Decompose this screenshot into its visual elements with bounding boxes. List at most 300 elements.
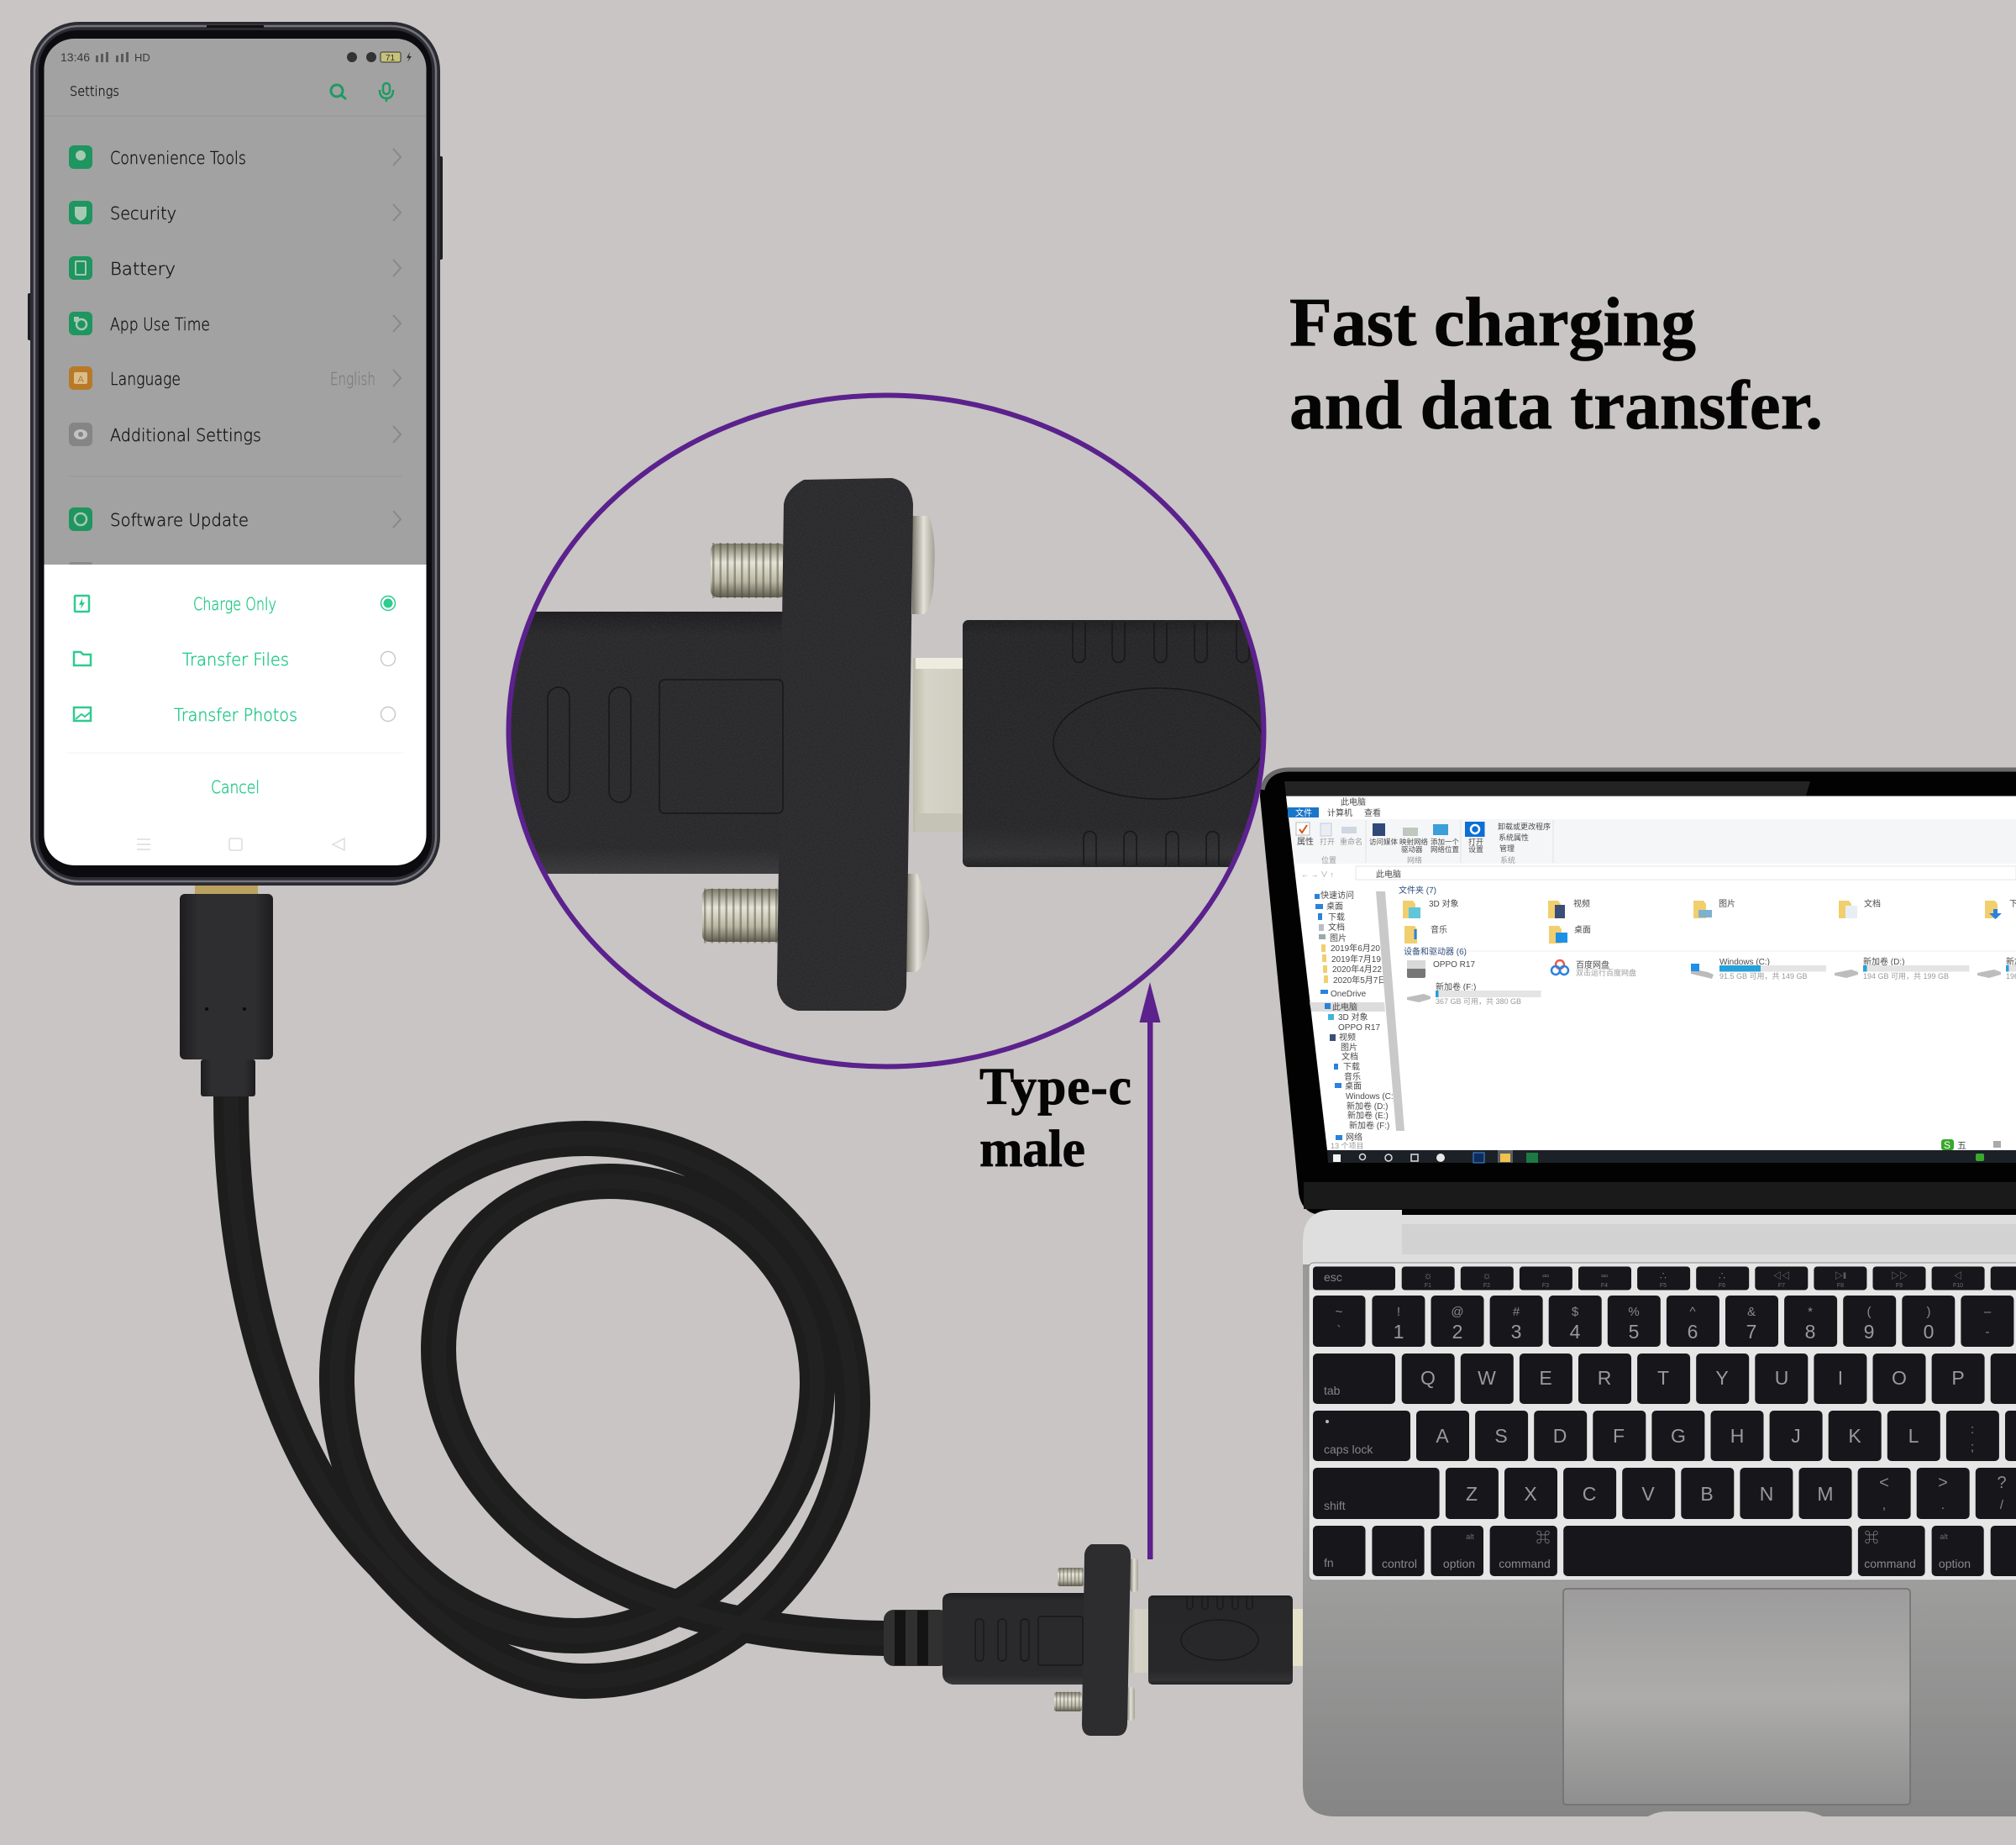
large upper screw (711, 544, 786, 597)
large lower screw (702, 889, 782, 942)
navigation pane: 此电脑 (1332, 1001, 1357, 1012)
number key row: 6 (1688, 1321, 1698, 1343)
row: battery: Battery (110, 259, 176, 279)
function key row: F6 (1719, 1283, 1725, 1289)
function key row: ▫▫ (1542, 1271, 1549, 1281)
address bar: ← → ∨ ↑ (1301, 870, 1334, 879)
qwerty key row (1313, 1354, 2016, 1404)
label: type-c male: Type-c (979, 1059, 1131, 1116)
media icon (1373, 823, 1385, 836)
status bar: HD (134, 51, 150, 64)
status bar: 13:46 (60, 50, 90, 64)
asdf key row: caps lock (1324, 1443, 1373, 1456)
flange (1082, 1544, 1131, 1736)
phone device: OPPO R17 (1433, 960, 1475, 970)
drive D (1835, 956, 1969, 980)
zxcv key row: X (1524, 1483, 1537, 1505)
number key row: ( (1866, 1305, 1872, 1319)
function key row: esc (1324, 1270, 1342, 1284)
navigation pane (1310, 890, 1396, 1150)
folder labels: 文档 (1864, 898, 1881, 909)
modifier key row: command (1864, 1557, 1916, 1570)
number key row: @ (1451, 1305, 1464, 1319)
ribbon buttons: 卸载或更改程序 (1498, 822, 1551, 831)
status icons (347, 52, 412, 63)
qwerty key row: tab (1324, 1384, 1341, 1397)
number key row: 8 (1805, 1321, 1815, 1343)
usb options sheet (44, 565, 427, 867)
zxcv key row: Z (1466, 1483, 1478, 1505)
metal plug into laptop (1291, 1609, 1303, 1666)
laptop (1260, 768, 2016, 1817)
folder labels (1429, 898, 2016, 935)
plug dots (205, 1007, 246, 1011)
number key row (1313, 1296, 2013, 1347)
ribbon (1289, 819, 2016, 864)
modifier key row: ⌘ (1865, 1530, 1878, 1546)
modifier key row: option (1443, 1557, 1475, 1570)
qwerty key row: Q (1420, 1367, 1436, 1389)
panel mount connector (884, 1544, 1303, 1736)
function key row: ◁ (1954, 1271, 1962, 1281)
ribbon buttons: 打开 (1320, 837, 1335, 846)
modifier key row: alt (1466, 1532, 1474, 1541)
status bar (61, 52, 412, 62)
folder labels: 音乐 (1431, 924, 1447, 935)
large upper screw head (912, 516, 935, 614)
upper screw thread (1058, 1568, 1084, 1586)
function key row: F9 (1896, 1283, 1903, 1289)
navigation pane: Windows (C:) (1346, 1092, 1396, 1101)
asdf key row: H (1730, 1425, 1744, 1447)
cancel button: Cancel (211, 777, 260, 797)
large flange (777, 478, 913, 1011)
row: language (69, 366, 401, 390)
phone metal ring (34, 26, 436, 881)
zxcv key row: C (1583, 1483, 1596, 1505)
row: convenience tools: Convenience Tools (110, 148, 246, 168)
input method toolbar: S (1944, 1139, 1950, 1151)
number key row: - (1986, 1325, 1989, 1339)
zxcv key row: < (1879, 1474, 1889, 1492)
qwerty key row: R (1598, 1367, 1611, 1389)
connector body (942, 1593, 1088, 1685)
sheet background (44, 565, 427, 867)
usb-c plug at phone (180, 886, 273, 1096)
nav scrollbar (1376, 891, 1404, 1131)
phone outer frame (30, 22, 440, 886)
folder labels: 桌面 (1574, 924, 1591, 935)
qwerty key row: P (1951, 1367, 1965, 1389)
cable body (231, 1097, 885, 1681)
number key row: ` (1337, 1323, 1341, 1338)
taskbar (1327, 1150, 2016, 1163)
navigation pane: 新加卷 (E:) (1347, 1110, 1389, 1121)
label: type-c male: male (979, 1121, 1085, 1178)
function key row: F2 (1483, 1283, 1490, 1289)
navigation pane: 新加卷 (F:) (1349, 1120, 1389, 1131)
fan icon (1436, 1154, 1445, 1162)
folder labels: 3D 对象 (1429, 898, 1459, 909)
function key row: ☼ (1482, 1269, 1492, 1281)
cable sheen (231, 1097, 885, 1681)
navigation pane: 文档 (1328, 922, 1345, 933)
android nav bar (137, 838, 344, 850)
drive F: 367 GB 可用，共 380 GB (1436, 997, 1521, 1006)
female ribs and oval (1181, 1596, 1258, 1660)
excel icon (1526, 1153, 1538, 1163)
laptop lid (1260, 768, 2016, 1215)
ribbon buttons: 重命名 (1340, 837, 1362, 846)
navigation pane: 桌面 (1345, 1080, 1362, 1091)
dimmed settings background (44, 39, 427, 568)
navigation pane: 图片 (1341, 1042, 1357, 1053)
file tab: 文件 (1295, 807, 1312, 818)
zxcv key row: ? (1997, 1474, 2007, 1492)
address bar: 此电脑 (1376, 869, 1401, 880)
row: convenience tools (69, 145, 401, 169)
address bar (1301, 866, 2016, 880)
quick access title: 此电脑 (1341, 796, 1366, 807)
drive F (1407, 981, 1541, 1006)
search and task icons (1359, 1154, 1418, 1161)
upper screw head (1130, 1559, 1138, 1592)
row: language: English (330, 369, 375, 389)
function key row: F3 (1542, 1283, 1549, 1289)
phone screen (44, 39, 427, 867)
slots and badge recess (548, 680, 783, 813)
ribbon buttons: 管理 (1499, 844, 1515, 853)
zxcv key row: M (1817, 1483, 1834, 1505)
modifier key row: alt (1940, 1532, 1948, 1541)
properties icon (1296, 823, 1310, 835)
input method toolbar (1941, 1139, 2001, 1151)
folder icons (1403, 901, 2002, 944)
number key row: 0 (1924, 1321, 1934, 1343)
function key row: F7 (1778, 1283, 1785, 1289)
row: app use time: App Use Time (110, 314, 210, 334)
explorer window (1286, 796, 2016, 1163)
row: software update: Software Update (110, 510, 249, 530)
navigation pane: OPPO R17 (1338, 1023, 1380, 1033)
number key row: 3 (1511, 1321, 1521, 1343)
number key row: # (1513, 1305, 1520, 1319)
navigation pane: 视频 (1339, 1032, 1356, 1043)
gold contact (195, 886, 258, 895)
zxcv key row: B (1700, 1483, 1714, 1505)
modifier key row: option (1939, 1557, 1971, 1570)
function key row: F4 (1601, 1283, 1608, 1289)
asdf key row: A (1436, 1425, 1449, 1447)
row: app use time (69, 312, 401, 335)
lower screw head (1126, 1687, 1135, 1721)
arrow: connector to magnifier (1139, 982, 1161, 1559)
file tab (1288, 807, 1319, 818)
magnified connector (496, 478, 1282, 1011)
row: additional settings: Additional Settings (110, 425, 261, 445)
modifier key row: ⌘ (1536, 1530, 1551, 1546)
function key row: ▫▫ (1601, 1271, 1608, 1281)
asdf key row: : (1971, 1422, 1974, 1437)
ribbon buttons: 添加一个 (1431, 838, 1460, 846)
earpiece (207, 25, 264, 28)
navigation pane: 下载 (1343, 1062, 1360, 1072)
ribbon buttons: 网络位置 (1431, 845, 1460, 854)
option: transfer files (72, 650, 396, 667)
qwerty key row: W (1478, 1367, 1496, 1389)
arrow head (1139, 982, 1161, 1022)
header divider (44, 116, 427, 117)
ribbon buttons: 驱动器 (1401, 845, 1423, 854)
navigation pane: OneDrive (1331, 990, 1367, 999)
asdf key row: G (1671, 1425, 1686, 1447)
metal shell (1131, 1609, 1151, 1673)
settings icon (1465, 822, 1485, 837)
hidden row icon stub (69, 562, 92, 565)
asdf key row: F (1613, 1425, 1625, 1447)
number key row: * (1808, 1305, 1813, 1319)
number key row: 7 (1746, 1321, 1756, 1343)
trackpad (1563, 1589, 1910, 1805)
navigation pane: 2019年7月19日 (1331, 954, 1389, 965)
asdf key row: S (1494, 1425, 1508, 1447)
navigation pane: 2019年6月20日 (1331, 943, 1389, 954)
asdf key row: K (1848, 1425, 1861, 1447)
drives heading: 设备和驱动器 (6) (1404, 946, 1467, 957)
navigation pane: 2020年4月22日 (1332, 964, 1390, 975)
label: type-c male (979, 1059, 1131, 1178)
function key row: ▷▷ (1891, 1271, 1908, 1281)
top deck (1303, 1210, 2016, 1264)
ribbon buttons (1296, 822, 1551, 865)
row: software update (69, 507, 401, 531)
navigation pane: 文档 (1341, 1051, 1358, 1062)
drive C (1691, 958, 1826, 980)
smartphone (28, 22, 443, 886)
large metal shell (913, 658, 963, 832)
view tab: 查看 (1364, 807, 1381, 818)
asdf key row (1313, 1411, 2016, 1461)
plug housing (180, 894, 273, 1059)
magnifier circle (496, 395, 1282, 1067)
navigation pane: 13 个项目 (1331, 1142, 1364, 1150)
zxcv key row: > (1938, 1474, 1948, 1492)
number key row: & (1747, 1305, 1756, 1319)
row: security (69, 201, 401, 224)
front notch (1646, 1811, 1824, 1817)
open icon (1320, 823, 1331, 836)
lid chin shading (1304, 1182, 2016, 1209)
keyboard (1313, 1267, 2016, 1576)
strain relief (884, 1610, 949, 1666)
speaker grille (1402, 1224, 2016, 1254)
arrow shaft (1147, 1022, 1152, 1559)
search icon (331, 85, 346, 99)
photoshop icon (1473, 1153, 1484, 1163)
selected item highlight (1310, 1002, 1385, 1012)
nav icons (1315, 894, 1342, 1140)
option: charge only: Charge Only (193, 594, 276, 614)
phone inner bezel (39, 30, 432, 877)
hinge strip (1402, 1210, 2016, 1215)
number key row: ~ (1336, 1305, 1343, 1319)
navigation pane: 图片 (1330, 933, 1347, 944)
folders heading: 文件夹 (7) (1399, 885, 1436, 896)
row: language: A (77, 375, 84, 385)
tray icons (1976, 1154, 1984, 1161)
navigation pane: 3D 对象 (1338, 1012, 1368, 1022)
ribbon buttons: 属性 (1297, 836, 1314, 847)
navigation pane: 下载 (1328, 912, 1345, 922)
number key row: 5 (1629, 1321, 1639, 1343)
drive E (1977, 956, 2016, 980)
qwerty key row: I (1838, 1367, 1843, 1389)
number key row: 4 (1570, 1321, 1581, 1343)
function key row: F8 (1837, 1283, 1844, 1289)
drive D: 194 GB 可用，共 199 GB (1863, 972, 1949, 980)
function key row: ☼ (1423, 1269, 1433, 1281)
keyboard well (1309, 1263, 2016, 1580)
qwerty key row: O (1892, 1367, 1907, 1389)
function key row: F10 (1953, 1283, 1963, 1289)
zxcv key row: , (1882, 1498, 1886, 1512)
row: additional settings (69, 423, 401, 446)
function key row: ∴ (1659, 1272, 1667, 1281)
modifier key row (1313, 1526, 2016, 1576)
number key row: % (1628, 1305, 1640, 1319)
number key row: ! (1397, 1305, 1400, 1319)
female end (1148, 1595, 1293, 1685)
number key row: 1 (1394, 1321, 1404, 1343)
ribbon buttons: 映射网络 (1399, 838, 1429, 846)
status icons: 71 (386, 54, 396, 63)
number key row: $ (1572, 1305, 1579, 1319)
large lower screw head (906, 874, 929, 972)
plug neck (201, 1059, 255, 1096)
lid screen reflection (1284, 781, 1810, 796)
number key row: – (1984, 1305, 1992, 1319)
qwerty key row: T (1657, 1367, 1669, 1389)
option: transfer files: Transfer Files (182, 649, 289, 670)
drive C: Windows (C:) (1719, 958, 1770, 967)
heading: fast charging (1289, 283, 1823, 444)
ribbon group dividers (1366, 820, 1553, 863)
function key row: ▷‖ (1835, 1271, 1846, 1281)
number key row: 2 (1452, 1321, 1462, 1343)
folder labels: 视频 (1573, 898, 1590, 909)
drive C: 91.5 GB 可用，共 149 GB (1719, 972, 1808, 980)
row: language: Language (110, 369, 181, 389)
option: transfer photos (72, 706, 396, 723)
qwerty key row: E (1539, 1367, 1552, 1389)
drive F: 新加卷 (F:) (1436, 981, 1476, 992)
baidu netdisk (1551, 959, 1636, 977)
modifier key row: fn (1324, 1556, 1334, 1569)
zxcv key row (1313, 1468, 2016, 1519)
zxcv key row: N (1760, 1483, 1773, 1505)
navigation pane: 快速访问 (1320, 890, 1354, 901)
zxcv key row: . (1941, 1498, 1945, 1512)
sheet divider (67, 753, 403, 754)
settings title: Settings (70, 83, 119, 99)
side buttons (28, 156, 443, 340)
female grip notches (1053, 623, 1263, 865)
navigation pane: 新加卷 (D:) (1347, 1101, 1388, 1112)
function key row: F1 (1425, 1283, 1431, 1289)
function key row: F5 (1660, 1283, 1667, 1289)
function key row (1313, 1267, 2016, 1290)
slots and badge (975, 1616, 1083, 1665)
heading: fast charging: Fast charging (1289, 283, 1696, 360)
function key row: ∴ (1718, 1272, 1726, 1281)
ribbon buttons: 访问媒体 (1369, 838, 1399, 846)
usb-c cable (231, 1097, 885, 1681)
navigation pane: 2020年5月7日 (1333, 975, 1386, 986)
qwerty key row: Y (1715, 1367, 1729, 1389)
zxcv key row: / (2000, 1498, 2004, 1512)
list divider (69, 476, 402, 477)
input method toolbar: 五 (1957, 1141, 1966, 1151)
asdf key row: ; (1971, 1440, 1974, 1454)
ribbon buttons: 系统 (1500, 855, 1515, 865)
asdf key row: D (1553, 1425, 1567, 1447)
option: charge only (75, 594, 395, 614)
navigation pane: 音乐 (1344, 1071, 1361, 1082)
computer tab: 计算机 (1327, 807, 1352, 818)
phone device (1407, 960, 1475, 978)
ribbon buttons: 网络 (1407, 855, 1422, 865)
ribbon buttons: 系统属性 (1499, 833, 1529, 842)
asdf key row: J (1791, 1425, 1801, 1447)
drive D: 新加卷 (D:) (1863, 956, 1904, 967)
explorer icon (1498, 1150, 1513, 1163)
modifier key row: control (1382, 1557, 1417, 1570)
zxcv key row: V (1641, 1483, 1655, 1505)
function key row: ◁◁ (1773, 1271, 1790, 1281)
ribbon buttons: 位置 (1321, 855, 1336, 865)
laptop base (1303, 1210, 2016, 1816)
lid metal rim (1263, 770, 2016, 790)
number key row: ^ (1689, 1305, 1696, 1319)
start button (1333, 1154, 1341, 1162)
navigation pane: 桌面 (1326, 901, 1343, 912)
navigation pane: 网络 (1346, 1132, 1362, 1143)
baidu netdisk: 百度网盘 (1576, 959, 1609, 970)
asdf key row: L (1908, 1425, 1919, 1447)
ribbon buttons: 打开 (1468, 837, 1483, 846)
circle outline (509, 395, 1263, 1067)
row: battery (69, 256, 401, 280)
number key row: ) (1927, 1305, 1930, 1319)
lower screw thread (1054, 1692, 1082, 1711)
zxcv key row: shift (1324, 1499, 1346, 1512)
large connector body (511, 612, 783, 874)
section line (1466, 950, 2016, 952)
qwerty key row: U (1775, 1367, 1788, 1389)
baidu netdisk: 双击运行百度网盘 (1576, 968, 1636, 977)
heading: fast charging: and data transfer. (1289, 366, 1823, 444)
row: security: Security (110, 203, 176, 223)
folder labels: 图片 (1719, 898, 1735, 909)
ribbon buttons: 设置 (1468, 845, 1483, 854)
modifier key row: command (1499, 1557, 1551, 1570)
microphone icon (380, 83, 393, 102)
female oval badge (1053, 688, 1263, 799)
large female end (963, 620, 1282, 867)
window background (1286, 796, 2016, 1150)
number key row: 9 (1864, 1321, 1874, 1343)
option: transfer photos: Transfer Photos (174, 705, 297, 725)
